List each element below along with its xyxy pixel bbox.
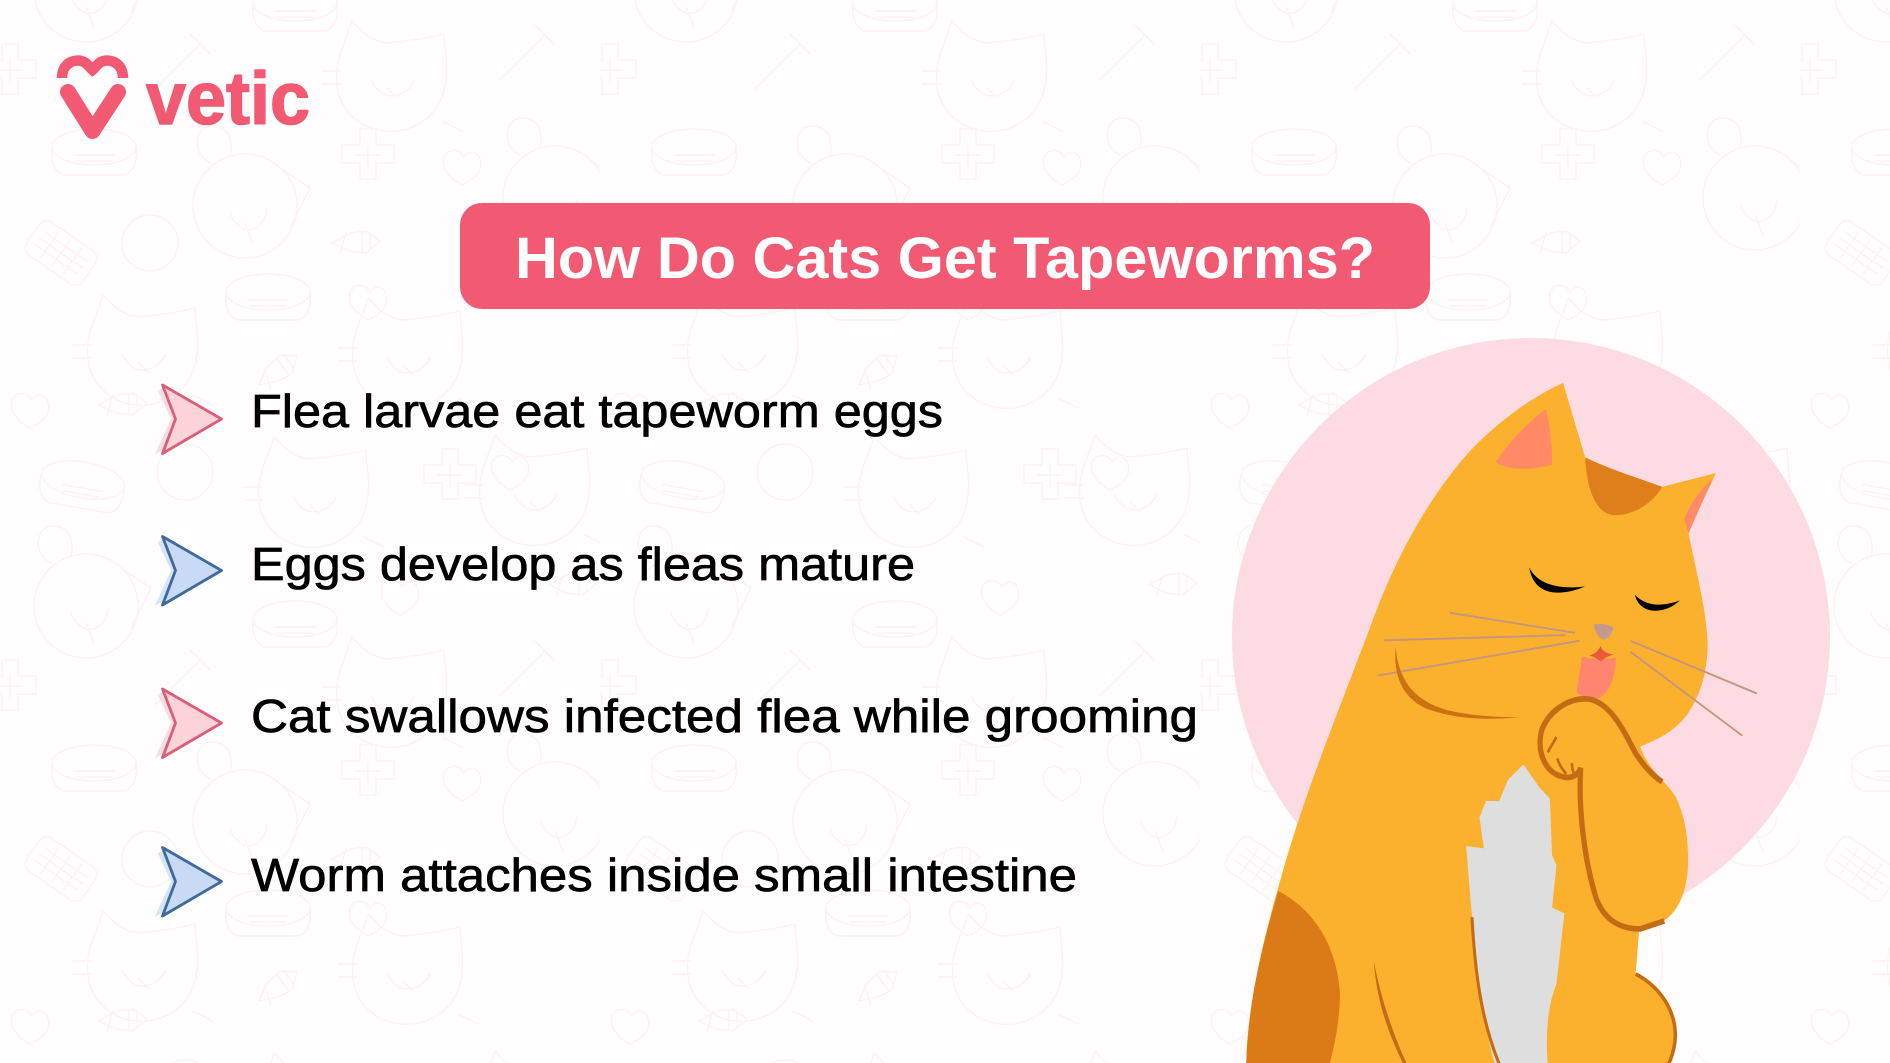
step text: Worm attaches inside small intestine (251, 849, 1077, 901)
title text: How Do Cats Get Tapeworms? (515, 226, 1375, 291)
logo: vetic (62, 57, 310, 140)
step text: Eggs develop as fleas mature (251, 538, 915, 590)
step text: Flea larvae eat tapeworm eggs (251, 385, 943, 437)
icon: pink arrow (155, 385, 222, 454)
list item 1 (155, 385, 943, 454)
list item 4 (155, 848, 1077, 916)
illustration: grooming cat (1246, 383, 1757, 1063)
pink circle behind cat (1232, 338, 1830, 936)
logo wordmark: vetic (146, 57, 310, 140)
icon: blue arrow (155, 848, 222, 916)
title banner (460, 203, 1430, 309)
icon: pink arrow (155, 689, 222, 758)
step text: Cat swallows infected flea while grooming (251, 690, 1198, 742)
icon: heart and V mark (62, 61, 123, 131)
list item 3 (155, 689, 1198, 758)
icon: blue arrow (155, 536, 222, 606)
list item 2 (155, 536, 915, 606)
